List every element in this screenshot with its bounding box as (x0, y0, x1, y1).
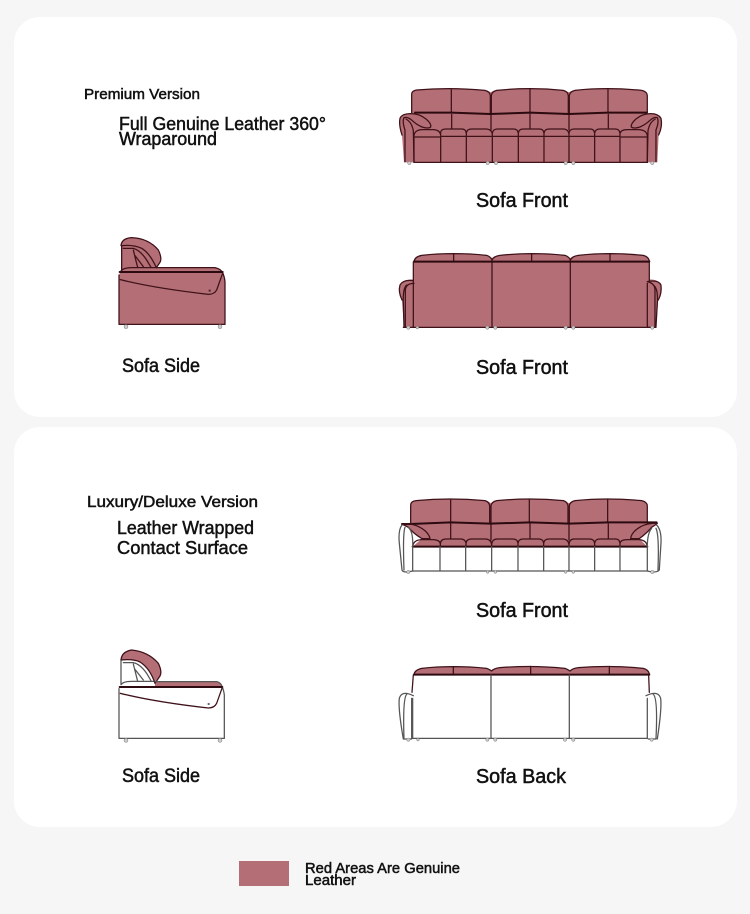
text: leather wrapped contact surface: Contact Surface (117, 538, 248, 558)
panel: premium version (14, 17, 737, 417)
text: full genuine leather description (119, 114, 326, 149)
text: leather wrapped contact surface: Leather Wrapped (117, 518, 254, 538)
text: full genuine leather description: Full Genuine Leather 360° (119, 114, 326, 134)
label: sofa side: Sofa Side (122, 766, 200, 787)
illustration: sofa rear, full leather (399, 254, 661, 329)
label: sofa front: Sofa Front (476, 190, 568, 212)
heading: premium version: Premium Version (84, 87, 200, 103)
illustration: sofa side, contact surface leather (119, 650, 224, 742)
illustration: sofa side, full leather (119, 238, 225, 329)
label: sofa side: Sofa Side (122, 356, 200, 377)
legend text: Red Areas Are Genuine (305, 861, 460, 877)
label: second sofa front: Sofa Front (476, 357, 568, 379)
illustration: sofa front, contact surface leather (399, 499, 661, 574)
text: leather wrapped contact surface (117, 518, 254, 558)
legend swatch (239, 861, 289, 886)
label: sofa front: Sofa Front (476, 600, 568, 622)
legend text: Leather (305, 873, 356, 889)
panel: luxury deluxe version (14, 427, 737, 827)
illustration: sofa back, contact surface leather (399, 666, 661, 741)
text: full genuine leather description: Wraparound (119, 129, 217, 149)
legend text (305, 861, 460, 889)
heading: luxury deluxe version: Luxury/Deluxe Version (87, 494, 258, 511)
label: sofa back: Sofa Back (476, 766, 567, 788)
illustration: sofa front, full leather (400, 89, 661, 165)
legend (239, 861, 460, 889)
